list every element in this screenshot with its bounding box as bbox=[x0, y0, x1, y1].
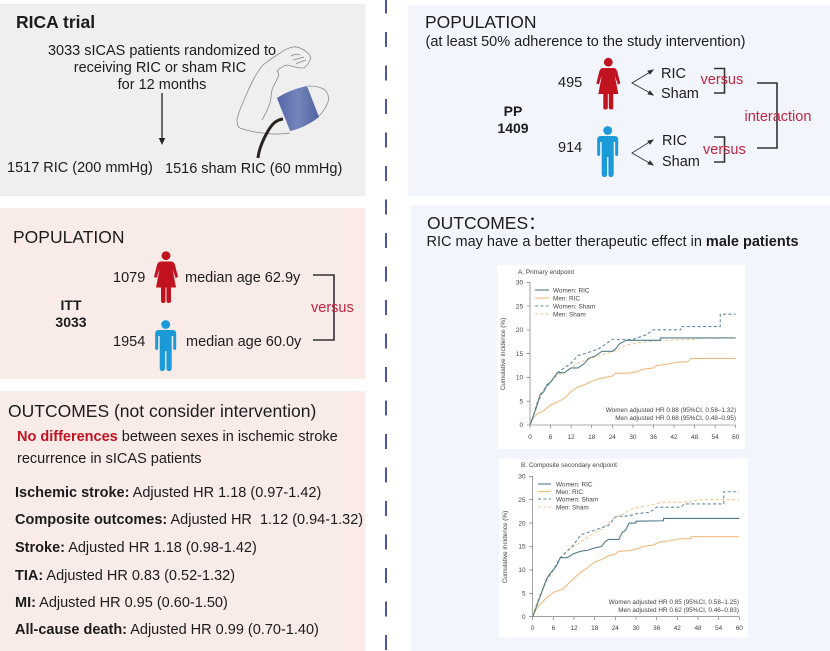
y axis labels: 10 bbox=[516, 375, 523, 382]
list: adjusted hazard ratios: Stroke: Adjusted HR 1.18 (0.98-1.42) bbox=[15, 540, 257, 556]
text: women arms bbox=[661, 66, 699, 102]
y axis labels: 15 bbox=[516, 351, 523, 358]
x axis labels: 0 bbox=[528, 434, 532, 441]
x axis labels: 24 bbox=[609, 434, 616, 441]
text: men count: 914 bbox=[558, 140, 582, 156]
chart: primary endpoint bbox=[498, 265, 745, 449]
legend: Men: RIC bbox=[553, 295, 580, 302]
y axis labels bbox=[518, 474, 526, 621]
label: versus women: versus bbox=[700, 72, 743, 88]
arrows: women split bbox=[632, 70, 653, 95]
legend: Men: Sham bbox=[553, 311, 586, 318]
y axis labels: 0 bbox=[522, 614, 526, 621]
hazard ratio notes bbox=[609, 599, 739, 614]
x axis labels: 18 bbox=[591, 625, 599, 632]
y axis labels: 15 bbox=[518, 544, 526, 551]
x axis labels: 30 bbox=[632, 625, 640, 632]
bracket: women vs men bbox=[313, 275, 334, 340]
hazard ratio notes: Women adjusted HR 0.88 (95%CI, 0.58–1.32) bbox=[606, 407, 736, 414]
x axis labels: 6 bbox=[549, 434, 553, 441]
x axis labels: 36 bbox=[650, 434, 657, 441]
y axis labels: 20 bbox=[518, 520, 526, 527]
y axis labels: 10 bbox=[518, 567, 526, 574]
x axis labels: 18 bbox=[588, 434, 596, 441]
text: men arms bbox=[662, 133, 700, 170]
legend: Men: RIC bbox=[556, 489, 583, 496]
x axis labels: 12 bbox=[570, 625, 578, 632]
icon: woman bbox=[596, 58, 620, 110]
label: ITT 3033 bbox=[55, 297, 87, 330]
legend: Women: RIC bbox=[556, 481, 593, 488]
bracket: women versus bbox=[714, 68, 724, 93]
list: adjusted hazard ratios: TIA: Adjusted HR 0.83 (0.52-1.32) bbox=[15, 568, 235, 584]
list: adjusted hazard ratios bbox=[15, 485, 363, 638]
text: trial description: receiving RIC or sham RIC bbox=[74, 60, 246, 76]
divider bbox=[385, 0, 387, 651]
text: men arms: Sham bbox=[662, 154, 700, 170]
panel: PP population bbox=[408, 5, 830, 196]
y axis labels: 20 bbox=[516, 327, 523, 334]
panel: ITT population bbox=[0, 208, 366, 379]
text: women count and age: median age 62.9y bbox=[185, 270, 301, 286]
text: men count and age bbox=[113, 334, 302, 350]
list: adjusted hazard ratios: Composite outcomes: Adjusted HR 1.12 (0.94-1.32) bbox=[15, 512, 363, 528]
text: men count and age: 1954 bbox=[113, 334, 145, 350]
panel: RICA trial bbox=[0, 4, 366, 196]
legend bbox=[535, 287, 595, 318]
text: women count: 495 bbox=[558, 75, 582, 91]
icon: arm with cuff bbox=[237, 47, 329, 158]
label: versus: versus bbox=[311, 300, 354, 316]
text: sham arm: 1516 sham RIC (60 mmHg) bbox=[165, 161, 342, 177]
heading: outcomes: OUTCOMES： bbox=[427, 213, 546, 233]
x axis labels: 60 bbox=[736, 625, 743, 632]
label: PP 1409: 1409 bbox=[497, 120, 529, 136]
chart: primary endpoint: Cumulative incidence (%) bbox=[500, 318, 507, 390]
label: PP 1409 bbox=[497, 103, 529, 136]
label: interaction: interaction bbox=[744, 109, 811, 125]
legend: Women: Sham bbox=[553, 303, 595, 310]
chart: composite secondary endpoint: Cumulative incidence (%) bbox=[502, 511, 509, 583]
label: ITT 3033: ITT bbox=[60, 297, 82, 313]
text: no differences statement: No differences between sexes in ischemic stroke bbox=[17, 429, 338, 445]
y axis labels: 30 bbox=[518, 474, 526, 480]
y axis labels: 25 bbox=[516, 303, 523, 310]
bracket: interaction bbox=[757, 83, 777, 148]
text: RIC arm: 1517 RIC (200 mmHg) bbox=[7, 160, 153, 176]
x axis labels: 48 bbox=[691, 434, 699, 441]
text: adherence note: (at least 50% adherence to the study intervention) bbox=[426, 34, 746, 50]
x axis labels bbox=[528, 434, 740, 441]
list: adjusted hazard ratios: All-cause death: Adjusted HR 0.99 (0.70-1.40) bbox=[15, 622, 319, 638]
hazard ratio notes: Men adjusted HR 0.62 (95%CI, 0.46–0.83) bbox=[618, 607, 739, 614]
text: no differences statement: recurrence in sICAS patients bbox=[17, 451, 202, 467]
text: women arms: RIC bbox=[661, 66, 686, 82]
y axis labels: 5 bbox=[522, 590, 526, 598]
x axis labels bbox=[531, 625, 743, 632]
x axis labels: 30 bbox=[629, 434, 637, 441]
hazard ratio notes: Women adjusted HR 0.85 (95%CI, 0.58–1.25) bbox=[609, 599, 739, 606]
y axis labels bbox=[516, 280, 523, 429]
text: women count and age bbox=[113, 270, 301, 286]
legend bbox=[538, 481, 598, 511]
x axis labels: 12 bbox=[568, 434, 575, 441]
heading: RICA trial: RICA trial bbox=[16, 12, 95, 32]
text: trial description: 3033 sICAS patients randomized to bbox=[48, 43, 276, 59]
label: ITT 3033: 3033 bbox=[55, 314, 87, 330]
text: trial description: for 12 months bbox=[118, 77, 206, 93]
text: women arms: Sham bbox=[661, 86, 699, 102]
panel: outcomes without intervention bbox=[0, 391, 366, 651]
panel: outcomes by sex bbox=[411, 205, 830, 651]
x axis labels: 48 bbox=[694, 625, 702, 632]
arrows: men split bbox=[632, 140, 653, 165]
icon: man bbox=[155, 320, 176, 371]
list: adjusted hazard ratios: Ischemic stroke: Adjusted HR 1.18 (0.97-1.42) bbox=[15, 485, 321, 501]
x axis labels: 36 bbox=[653, 625, 661, 632]
y axis labels: 30 bbox=[516, 280, 523, 286]
x axis labels: 6 bbox=[552, 625, 556, 632]
heading: population: POPULATION bbox=[13, 227, 125, 247]
bracket: men versus bbox=[714, 137, 724, 162]
icon: woman bbox=[154, 251, 178, 303]
list: adjusted hazard ratios: MI: Adjusted HR 0.95 (0.60-1.50) bbox=[15, 595, 228, 611]
label: versus men: versus bbox=[703, 142, 746, 158]
x axis labels: 54 bbox=[715, 625, 723, 632]
y axis labels: 0 bbox=[519, 422, 523, 429]
text: women count and age: 1079 bbox=[113, 270, 145, 286]
axes bbox=[529, 476, 739, 620]
y axis labels: 5 bbox=[519, 398, 523, 405]
chart: composite secondary endpoint: B. Composite secondary endpoint bbox=[521, 462, 617, 469]
legend: Women: Sham bbox=[556, 496, 598, 503]
text: trial description bbox=[48, 43, 276, 93]
x axis labels: 42 bbox=[670, 434, 678, 441]
icon: man bbox=[597, 126, 618, 177]
chart: composite secondary endpoint bbox=[499, 459, 748, 637]
x axis labels: 42 bbox=[674, 625, 681, 632]
text: no differences statement bbox=[17, 429, 338, 467]
label: PP 1409: PP bbox=[504, 103, 522, 119]
text: conclusion: RIC may have a better therapeutic effect in male patients bbox=[426, 234, 799, 250]
curves bbox=[533, 492, 739, 617]
curves bbox=[530, 314, 736, 425]
heading: population: POPULATION bbox=[425, 12, 537, 32]
legend: Women: RIC bbox=[553, 287, 590, 294]
chart: primary endpoint: A. Primary endpoint bbox=[518, 269, 574, 276]
legend: Men: Sham bbox=[556, 504, 589, 511]
y axis labels: 25 bbox=[518, 497, 526, 504]
text: men arms: RIC bbox=[662, 133, 687, 149]
hazard ratio notes: Men adjusted HR 0.68 (95%CI, 0.48–0.95) bbox=[615, 415, 736, 422]
text: men count and age: median age 60.0y bbox=[186, 334, 302, 350]
x axis labels: 54 bbox=[712, 434, 719, 441]
hazard ratio notes bbox=[606, 407, 736, 422]
x axis labels: 0 bbox=[531, 625, 535, 632]
x axis labels: 60 bbox=[732, 434, 740, 441]
axes bbox=[526, 282, 736, 428]
heading: outcomes: OUTCOMES (not consider intervention) bbox=[8, 401, 316, 421]
x axis labels: 24 bbox=[612, 625, 619, 632]
arrow: randomization bbox=[159, 93, 165, 145]
